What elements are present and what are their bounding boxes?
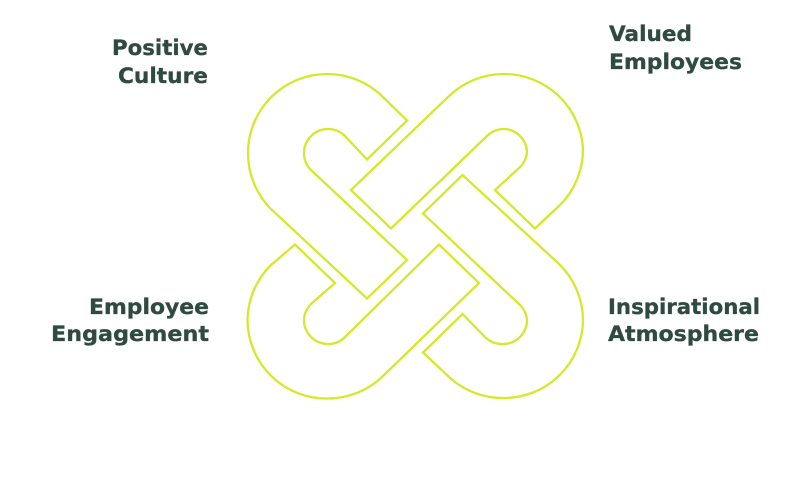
label: Employee Engagement: Engagement bbox=[51, 322, 209, 347]
label: Positive Culture bbox=[112, 36, 208, 89]
label: Valued Employees: Valued bbox=[609, 22, 692, 47]
label: Valued Employees: Employees bbox=[609, 50, 742, 75]
label: Inspirational Atmosphere: Atmosphere bbox=[608, 322, 759, 347]
knot link: top-left bbox=[248, 74, 407, 298]
label: Inspirational Atmosphere: Inspirational bbox=[608, 295, 760, 320]
interlocking knot diagram bbox=[248, 74, 583, 399]
label: Inspirational Atmosphere bbox=[608, 295, 760, 347]
label: Employee Engagement: Employee bbox=[89, 295, 209, 320]
label: Valued Employees bbox=[609, 22, 742, 75]
label: Employee Engagement bbox=[51, 295, 209, 347]
knot link: top-right bbox=[351, 74, 583, 228]
knot link: bottom-left bbox=[248, 244, 479, 399]
label: Positive Culture: Positive bbox=[112, 36, 208, 61]
knot link: bottom-right bbox=[423, 175, 583, 398]
label: Positive Culture: Culture bbox=[118, 64, 208, 89]
